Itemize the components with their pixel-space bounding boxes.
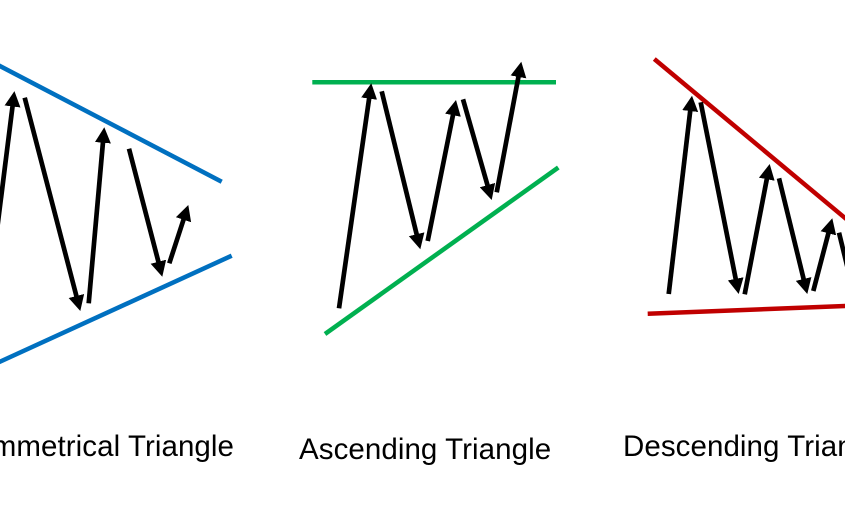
panel: descending triangle bbox=[623, 59, 845, 463]
label: Ascending Triangle bbox=[299, 433, 551, 466]
price arrows bbox=[669, 102, 845, 294]
lower trend line bbox=[0, 256, 232, 363]
rising support line bbox=[325, 168, 558, 334]
upper trend line bbox=[0, 65, 222, 182]
panel: symmetrical triangle bbox=[0, 65, 234, 463]
support line bbox=[648, 306, 845, 314]
resistance line bbox=[312, 80, 556, 85]
price arrows bbox=[339, 75, 519, 308]
price arrows bbox=[0, 98, 184, 303]
falling resistance line bbox=[654, 59, 845, 223]
panel: ascending triangle bbox=[299, 75, 558, 466]
